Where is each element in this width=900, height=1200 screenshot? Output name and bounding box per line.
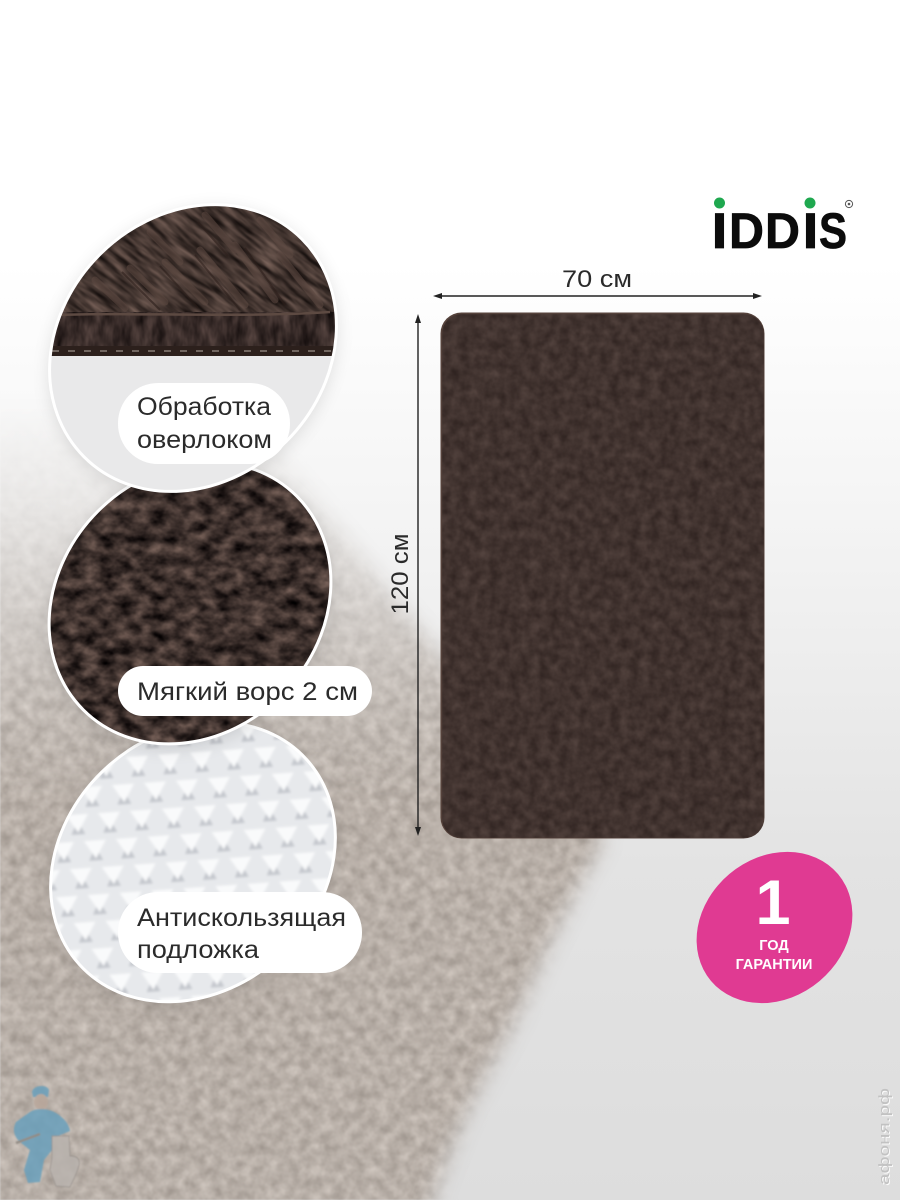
detail circle: anti-slip backing bbox=[49, 724, 337, 1006]
brand logo: S bbox=[819, 203, 847, 259]
label: soft pile: Мягкий ворс 2 см bbox=[137, 678, 358, 706]
label: anti-slip: подложка bbox=[137, 936, 259, 964]
label: overlock: оверлоком bbox=[137, 426, 272, 454]
warranty number: 1 bbox=[755, 868, 791, 938]
width dimension arrow bbox=[433, 293, 762, 299]
watermark text: афоня.рф bbox=[878, 1089, 894, 1186]
brand logo: I bbox=[802, 203, 818, 259]
brand logo bbox=[712, 198, 853, 259]
width label: 70 см bbox=[562, 266, 632, 293]
height dimension arrow bbox=[415, 314, 421, 836]
watermark text bbox=[877, 1088, 894, 1186]
detail circle: overlocked edge bbox=[44, 206, 341, 493]
warranty caption: ГАРАНТИИ bbox=[736, 957, 812, 973]
background rug texture bbox=[0, 449, 612, 1200]
warranty caption: ГОД bbox=[759, 938, 789, 954]
label: anti-slip bbox=[118, 892, 362, 973]
warranty badge bbox=[666, 821, 883, 1034]
bath mat product bbox=[440, 312, 764, 838]
brand logo: D bbox=[765, 203, 800, 259]
brand logo: I bbox=[712, 203, 728, 259]
label: overlock: Обработка bbox=[137, 393, 271, 421]
label: overlock bbox=[118, 383, 290, 464]
watermark text: афоня.рф bbox=[877, 1088, 893, 1185]
watermark icon: plumber with toilet bbox=[14, 1086, 79, 1187]
label: soft pile bbox=[118, 666, 372, 716]
brand logo: D bbox=[729, 203, 764, 259]
label: anti-slip: Антискользящая bbox=[137, 904, 346, 932]
detail circle: soft pile bbox=[44, 468, 336, 754]
height label: 120 см bbox=[387, 534, 414, 614]
